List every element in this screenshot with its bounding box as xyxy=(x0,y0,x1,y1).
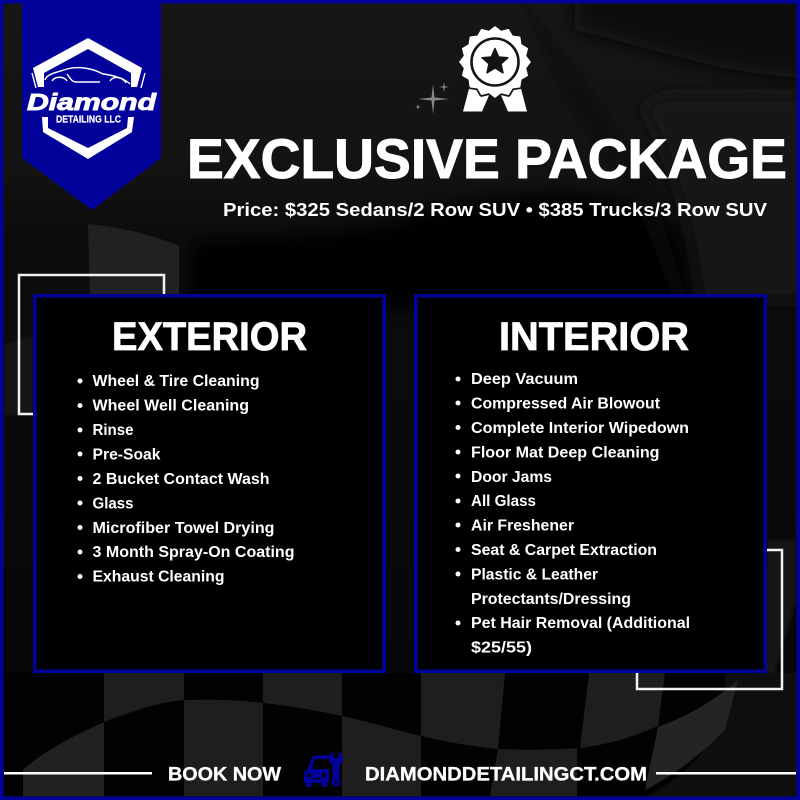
list: interior services: All Glass xyxy=(471,493,536,510)
book now: BOOK NOW xyxy=(168,764,281,786)
list: exterior services xyxy=(78,373,294,586)
heading: exterior: EXTERIOR xyxy=(112,315,307,359)
price line: Price: $325 Sedans/2 Row SUV • $385 Trucks/3 Row SUV xyxy=(223,200,767,220)
logo tagline: DETAILING LLC xyxy=(56,114,121,126)
icon: car and wrench xyxy=(304,750,343,787)
list: exterior services: Microfiber Towel Drying xyxy=(92,520,274,537)
list: exterior services: 3 Month Spray-On Coating xyxy=(92,544,294,561)
logo car xyxy=(32,68,145,88)
logo banner xyxy=(22,0,161,210)
list: exterior services: Exhaust Cleaning xyxy=(92,568,224,586)
heading: interior: INTERIOR xyxy=(499,315,689,359)
list: exterior services: 2 Bucket Contact Wash xyxy=(92,471,270,488)
list: exterior services: Pre-Soak xyxy=(92,446,161,464)
list: exterior services: Wheel Well Cleaning xyxy=(92,398,249,414)
white frame right xyxy=(637,550,782,689)
list: interior services: Compressed Air Blowout xyxy=(471,396,660,412)
list: interior services: $25/55) xyxy=(471,640,532,656)
panel: interior xyxy=(416,296,765,671)
website: DIAMONDDETAILINGCT.COM xyxy=(365,764,647,786)
list: interior services: Plastic & Leather xyxy=(471,566,598,584)
checkered flag xyxy=(4,673,800,800)
white frame left xyxy=(19,275,164,414)
panel: exterior xyxy=(35,296,384,671)
footer line right xyxy=(656,772,796,774)
list: exterior services: Wheel & Tire Cleaning xyxy=(92,373,260,390)
list: interior services: Air Freshener xyxy=(471,518,574,534)
list: interior services: Complete Interior Wipedown xyxy=(471,420,689,437)
list: interior services: Deep Vacuum xyxy=(471,371,578,388)
list: interior services: Floor Mat Deep Cleaning xyxy=(471,444,660,462)
list: interior services: Door Jams xyxy=(471,469,552,486)
title: EXCLUSIVE PACKAGE xyxy=(187,127,787,190)
icon: sparkles xyxy=(415,82,449,114)
footer line left xyxy=(4,772,152,774)
list: interior services: Seat & Carpet Extraction xyxy=(471,542,657,559)
icon: award badge xyxy=(460,27,530,112)
list: interior services xyxy=(456,371,690,656)
list: exterior services: Rinse xyxy=(92,422,134,439)
logo wordmark: Diamond xyxy=(27,89,157,115)
logo shield xyxy=(33,38,142,159)
list: interior services: Protectants/Dressing xyxy=(471,591,631,608)
list: exterior services: Glass xyxy=(92,496,134,512)
list: interior services: Pet Hair Removal (Additional xyxy=(471,615,690,632)
